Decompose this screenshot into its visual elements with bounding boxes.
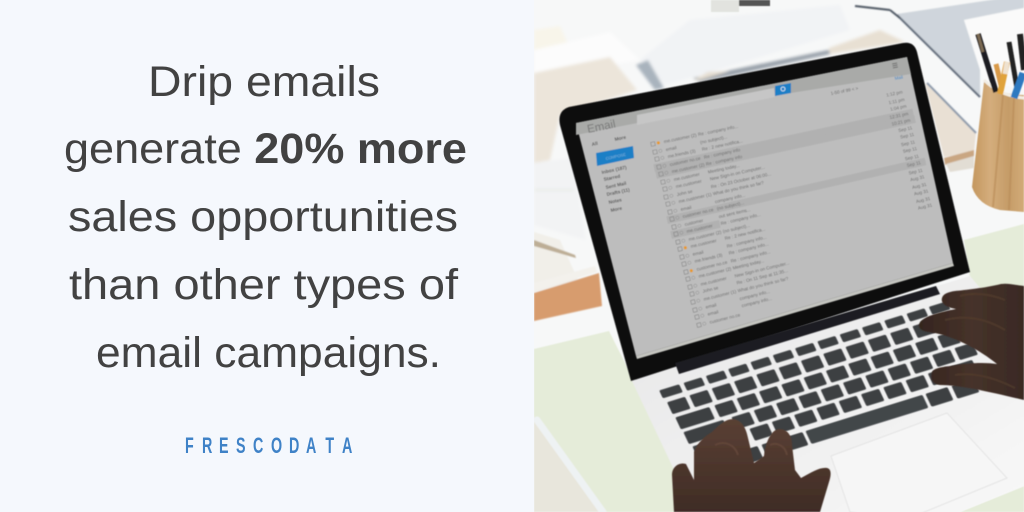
email list: Sep 11 xyxy=(900,132,915,140)
headline xyxy=(64,58,467,377)
headline: sales opportunities xyxy=(68,193,458,241)
email list: 1:04 pm xyxy=(890,104,907,112)
email list: Re : 2 new notifica... xyxy=(724,227,766,241)
email list: Sep 11 xyxy=(908,168,924,176)
email list: Re : On 11 Sep at 11:35... xyxy=(736,268,788,285)
email list: Sep 11 xyxy=(902,146,918,154)
email list: Sep 11 xyxy=(906,160,922,168)
email list: John se xyxy=(702,285,719,294)
email list: me.customer (1) xyxy=(703,289,737,302)
hinge xyxy=(675,286,940,374)
search button xyxy=(775,83,791,96)
email list: 1:11 pm xyxy=(888,97,905,105)
email list: Re : company info... xyxy=(698,124,739,137)
email list: What do you think so far? xyxy=(712,180,765,196)
menu icon xyxy=(892,63,898,68)
email list: customer no.ce xyxy=(669,156,701,167)
email list: Aug 31 xyxy=(910,174,925,182)
photo: laptop on desk xyxy=(534,0,1024,512)
sidebar: All xyxy=(591,141,598,148)
sidebar: Notes xyxy=(608,197,623,206)
email list: company info... xyxy=(714,193,746,204)
email list: customer xyxy=(684,218,704,227)
email list: me.customer xyxy=(686,223,714,234)
email list: me.customer (2) xyxy=(671,162,705,174)
email list: me.friends (3) xyxy=(667,148,696,159)
email list: 1:12 pm xyxy=(886,89,903,98)
laptop lid bezel xyxy=(559,43,970,381)
email list: Aug 31 xyxy=(914,188,929,197)
email list: Meeting today... xyxy=(732,258,765,271)
brand name: FRESCODATA xyxy=(185,433,352,458)
email list: Re : company info... xyxy=(720,212,761,226)
email list: Sep 11 xyxy=(901,139,916,147)
pencils xyxy=(978,34,1024,98)
email list: Re : company info xyxy=(705,154,743,167)
email list: company info... xyxy=(739,289,770,301)
email list: email xyxy=(680,205,692,212)
email list: email xyxy=(665,145,677,152)
email list: 12:31 pm xyxy=(889,111,909,120)
sidebar: COMPOSE xyxy=(605,152,627,161)
email list: Re : company info... xyxy=(730,249,771,264)
sidebar: Drafts (11) xyxy=(606,187,631,198)
pencil cup xyxy=(972,34,1024,212)
email list: Re : 2 new notifica... xyxy=(701,138,743,152)
email list: email xyxy=(692,250,704,257)
blurred desk objects xyxy=(534,27,904,192)
desk background xyxy=(534,0,1024,512)
headline: than other types of xyxy=(69,261,459,309)
email list: me.friends (3) xyxy=(694,252,723,264)
headline: Drip emails xyxy=(148,58,380,106)
email list: me.customer (1) xyxy=(678,192,712,204)
pen on desk xyxy=(537,420,603,512)
email list: (no subject)... xyxy=(722,223,750,234)
email list: Re : company info... xyxy=(726,235,767,249)
sidebar xyxy=(591,135,634,214)
sidebar: Starred xyxy=(603,174,621,183)
email list: email xyxy=(707,309,719,317)
email list: company info... xyxy=(741,296,772,308)
email list xyxy=(651,89,933,328)
email list: Re : company info xyxy=(703,147,741,160)
email list: customer no.ce xyxy=(709,312,741,325)
email list: me.customer (2) xyxy=(698,266,732,279)
email list: 10:21 pm xyxy=(891,118,911,127)
trackpad xyxy=(831,413,1007,512)
email screen xyxy=(576,57,954,359)
search box xyxy=(637,88,775,125)
folders and binder xyxy=(534,0,1024,321)
compose button xyxy=(596,146,634,166)
laptop base xyxy=(632,276,980,476)
email list: me.customer (2) xyxy=(688,229,722,242)
email list: Re : company info... xyxy=(728,241,769,256)
email list: (no subject)... xyxy=(699,134,728,145)
email list: me.customer xyxy=(675,178,703,189)
email list: customer no.ce xyxy=(696,260,728,272)
sidebar: Sent Mail xyxy=(605,181,627,191)
email list: out sent items... xyxy=(718,207,751,219)
email list: New Sign-in on Computer... xyxy=(709,165,765,182)
email list: me.customer xyxy=(673,171,701,182)
mail label: Mail xyxy=(894,74,903,81)
app title: Email xyxy=(586,118,617,136)
email list: Aug 31 xyxy=(917,202,933,211)
email list: (no subject)... xyxy=(716,200,745,211)
email list: me.customer (2) xyxy=(663,132,697,144)
email list: Re : On 23 October at 06:00... xyxy=(710,171,772,189)
left hand xyxy=(672,419,831,512)
green desk mat xyxy=(534,224,1024,512)
sidebar: More xyxy=(614,135,627,143)
headline: email campaigns. xyxy=(96,329,441,377)
app header band xyxy=(576,57,911,135)
keyboard xyxy=(658,302,980,462)
email list: Aug 31 xyxy=(915,196,931,204)
pagination: 1-50 of 99 < > xyxy=(830,86,859,96)
email list: me.customer xyxy=(700,276,728,287)
top edge object xyxy=(711,0,770,12)
email list: New Sign-in on Computer... xyxy=(734,260,790,279)
headline: generate 20% more xyxy=(64,125,467,173)
sidebar: More xyxy=(610,206,623,214)
email list: Sep 11 xyxy=(898,125,913,133)
email list: What do you think so far? xyxy=(737,276,789,293)
email list: Sep 11 xyxy=(904,153,920,162)
sidebar: Inbox (187) xyxy=(601,165,628,176)
email list: email xyxy=(705,302,717,310)
panel: text background xyxy=(0,0,534,512)
email list: Meeting today... xyxy=(707,163,740,175)
email list: customer no.ce xyxy=(682,207,714,219)
email list: Aug 31 xyxy=(912,182,927,190)
email list: me.customer xyxy=(690,238,718,249)
email list: John se xyxy=(676,189,693,197)
right hand xyxy=(919,284,1024,400)
